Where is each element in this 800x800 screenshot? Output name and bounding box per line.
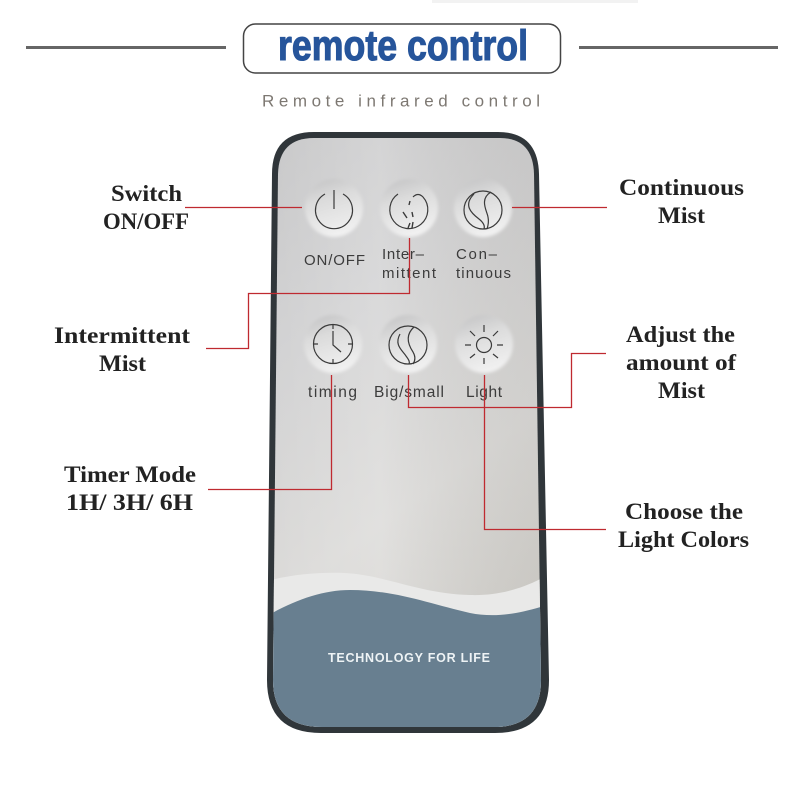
label: timer mode: Timer Mode [64,462,196,487]
leader line: continuous mist [512,206,607,208]
brand text: TECHNOLOGY FOR LIFE [328,651,490,665]
left header rule [26,46,226,49]
label: continuous mist: Mist [658,203,705,228]
leader line: adjust mist [408,354,606,408]
label: continuous mist: Continuous [619,175,744,200]
leader line: timer mode [208,375,332,490]
button: light [455,315,513,373]
button label: on/off: ON/OFF [304,252,365,269]
label: intermittent mist: Mist [99,351,146,376]
button: big/small [379,315,437,373]
button label: continuous: Con– [456,246,498,263]
subtitle: Remote infrared control [262,92,540,110]
button label: continuous: tinuous [456,265,511,282]
remote body [267,132,549,733]
label: adjust mist: Adjust the [626,322,735,347]
button: timing [304,315,362,373]
faint top bar [432,0,638,3]
button: continuous [454,179,512,237]
remote face [273,138,541,727]
label: light colors: Light Colors [618,527,749,552]
leader line: intermittent mist [206,238,410,348]
button label: intermittent: mittent [382,265,437,282]
leader line: switch [185,206,302,208]
label: light colors: Choose the [625,499,743,524]
button label: timing: timing [308,384,357,401]
button label: big/small: Big/small [374,384,444,401]
label: adjust mist: amount of [626,350,736,375]
right header rule [579,46,778,49]
label: adjust mist: Mist [658,378,705,403]
button: on/off [305,179,363,237]
button label: light: Light [466,384,503,401]
button: intermittent [380,179,438,237]
leader line: light colors [484,375,606,530]
button label: intermittent: Inter– [382,246,425,263]
label: switch on/off: Switch [111,181,182,206]
remote control device [260,130,560,740]
label: intermittent mist: Intermittent [54,323,190,348]
label: timer mode: 1H/ 3H/ 6H [66,490,193,515]
label: switch on/off: ON/OFF [103,209,189,234]
title badge: remote control [278,22,528,70]
